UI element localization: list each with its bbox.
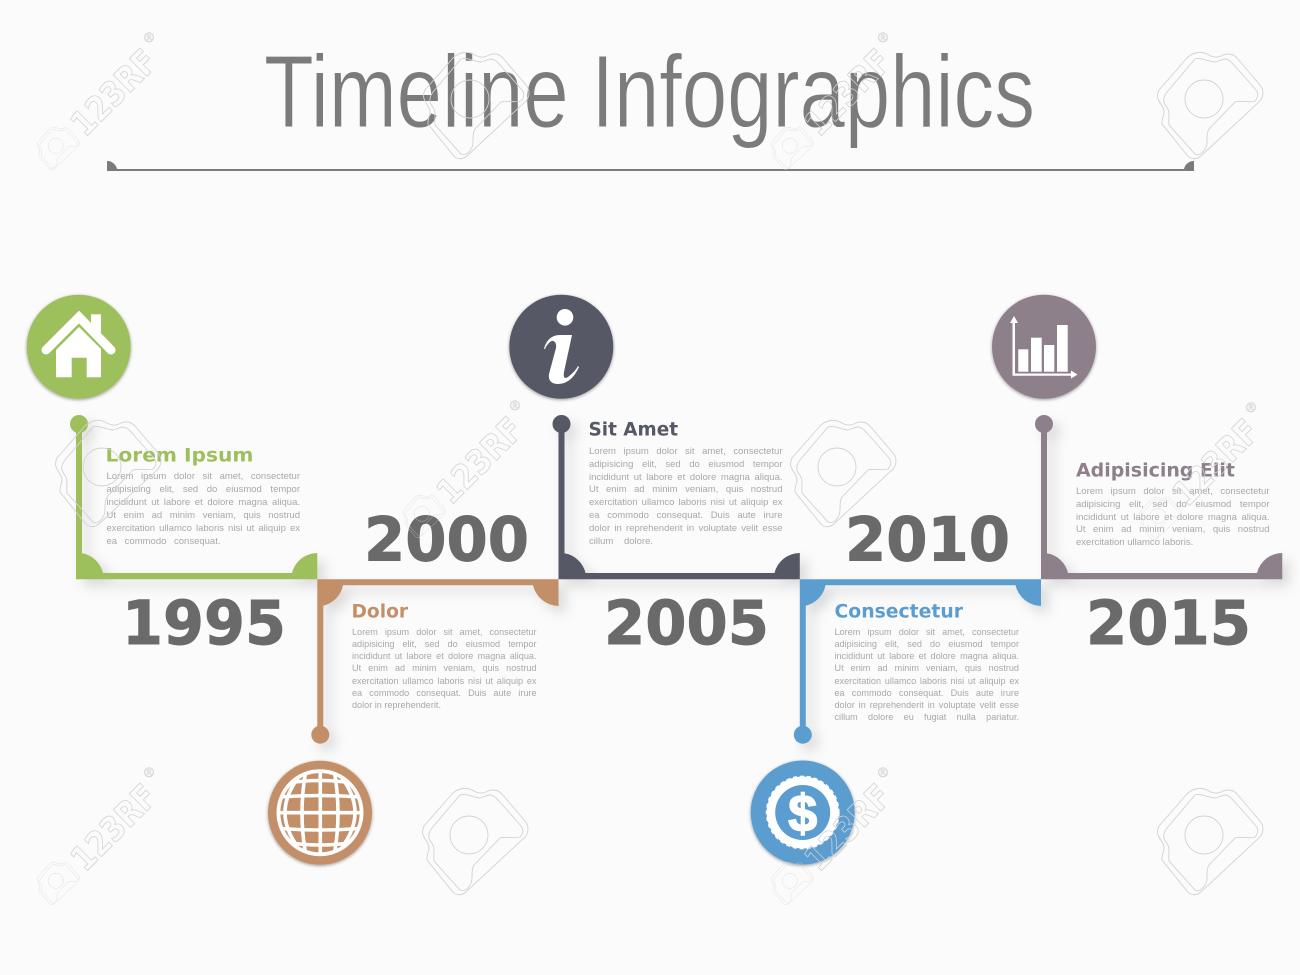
body text: exercitation ullamco laboris. bbox=[1076, 537, 1193, 548]
icon: bar chart bbox=[992, 295, 1096, 399]
watermarks: 123RF bbox=[429, 410, 532, 512]
heading: Dolor bbox=[352, 601, 408, 622]
body text bbox=[1076, 486, 1270, 548]
year: 2000 bbox=[364, 504, 529, 576]
watermarks: ® bbox=[876, 31, 890, 46]
body text: dolor in reprehenderit in voluptate velit esse bbox=[589, 523, 782, 534]
body text: cillum dolore eu fugiat nulla pariatur. bbox=[834, 712, 1019, 722]
connector bar green bbox=[70, 415, 317, 579]
body text: incididunt ut labore et dolore magna aliqua. bbox=[834, 651, 1019, 661]
icon: dollar bbox=[751, 760, 855, 864]
watermarks: ® bbox=[1244, 401, 1258, 416]
body text bbox=[106, 471, 300, 547]
watermarks: ® bbox=[142, 31, 156, 46]
body text: ea commodo consequat. Duis aute irure bbox=[834, 688, 1019, 698]
body text: adipisicing elit, sed do eiusmod tempor bbox=[834, 639, 1019, 649]
panel: 1995 Lorem Ipsum bbox=[24, 294, 328, 659]
body text: Ut enim ad minim veniam, quis nostrud bbox=[589, 484, 782, 495]
panel: 2015 Adipisicing Elit bbox=[990, 294, 1293, 659]
year: 2005 bbox=[604, 588, 769, 659]
heading: Sit Amet bbox=[588, 420, 678, 441]
title text: Timeline Infographics bbox=[264, 34, 1035, 149]
body text: Lorem ipsum dolor sit amet, consectetur bbox=[834, 627, 1019, 637]
year: 2010 bbox=[845, 504, 1010, 576]
icon: globe bbox=[268, 761, 372, 865]
body text: Lorem ipsum dolor sit amet, consectetur bbox=[106, 471, 300, 482]
panel: 2005 Sit Amet bbox=[507, 294, 810, 659]
year: 2015 bbox=[1086, 588, 1251, 659]
body text: adipisicing elit, sed do eiusmod tempor bbox=[106, 484, 300, 495]
body text: dolor in reprehenderit in voluptate velit esse bbox=[834, 700, 1019, 710]
body text: exercitation ullamco laboris nisi ut aliquip ex bbox=[106, 523, 300, 534]
body text: Lorem ipsum dolor sit amet, consectetur bbox=[589, 446, 782, 457]
watermarks: ® bbox=[142, 766, 156, 781]
body text: incididunt ut labore et dolore magna aliqua. bbox=[106, 497, 300, 508]
body text: incididunt ut labore et dolore magna aliqua. bbox=[589, 472, 782, 483]
watermarks: 123RF bbox=[797, 777, 900, 879]
icon: info bbox=[509, 295, 613, 399]
connector bar brown bbox=[311, 579, 558, 744]
body text: Ut enim ad minim veniam, quis nostrud bbox=[834, 663, 1019, 673]
body text: adipisicing elit, sed do eiusmod tempor bbox=[589, 459, 782, 470]
icon: dollar: $ bbox=[788, 785, 817, 843]
body text: Ut enim ad minim veniam, quis nostrud bbox=[1076, 524, 1270, 535]
body text: adipisicing elit, sed do eiusmod tempor bbox=[1076, 499, 1270, 510]
connector bar slate bbox=[552, 415, 800, 579]
watermarks: ® bbox=[508, 399, 522, 414]
heading: Lorem Ipsum bbox=[106, 446, 254, 467]
body text: ea commodo consequat. bbox=[106, 536, 220, 547]
body text: Ut enim ad minim veniam, quis nostrud bbox=[352, 663, 536, 673]
body text: Lorem ipsum dolor sit amet, consectetur bbox=[1076, 486, 1270, 497]
watermarks: ® bbox=[876, 766, 890, 781]
title bbox=[107, 34, 1194, 171]
connector bar mauve bbox=[1035, 415, 1282, 579]
panel: 2000 Dolor bbox=[266, 504, 570, 868]
watermarks: 123RF bbox=[797, 42, 900, 144]
body text: dolor in reprehenderit. bbox=[352, 700, 441, 710]
connector bar blue bbox=[794, 579, 1041, 744]
body text: incididunt ut labore et dolore magna aliqua. bbox=[352, 651, 536, 661]
body text: exercitation ullamco laboris nisi ut aliquip ex bbox=[589, 497, 782, 508]
title underline bbox=[107, 161, 1194, 171]
watermarks: 123RF bbox=[63, 42, 166, 144]
body text: Lorem ipsum dolor sit amet, consectetur bbox=[352, 627, 536, 637]
watermarks: 123RF bbox=[63, 777, 166, 879]
year: 1995 bbox=[122, 588, 286, 659]
body text: exercitation ullamco laboris nisi ut aliquip ex bbox=[834, 676, 1019, 686]
body text bbox=[352, 627, 536, 710]
body text: ea commodo consequat. Duis aute irure bbox=[589, 510, 782, 521]
heading: Consectetur bbox=[834, 601, 963, 622]
body text: exercitation ullamco laboris nisi ut aliquip ex bbox=[352, 676, 536, 686]
heading: Adipisicing Elit bbox=[1076, 461, 1235, 482]
body text: Ut enim ad minim veniam, quis nostrud bbox=[106, 510, 300, 521]
body text bbox=[834, 627, 1019, 722]
watermarks: 123RF bbox=[1165, 412, 1268, 514]
body text: cillum dolore. bbox=[589, 536, 653, 547]
body text: incididunt ut labore et dolore magna aliqua. bbox=[1076, 512, 1270, 523]
panel: 2010 Consectetur bbox=[748, 504, 1052, 868]
body text: adipisicing elit, sed do eiusmod tempor bbox=[352, 639, 536, 649]
body text bbox=[589, 446, 782, 547]
icon: house bbox=[27, 295, 131, 399]
body text: ea commodo consequat. Duis aute irure bbox=[352, 688, 536, 698]
